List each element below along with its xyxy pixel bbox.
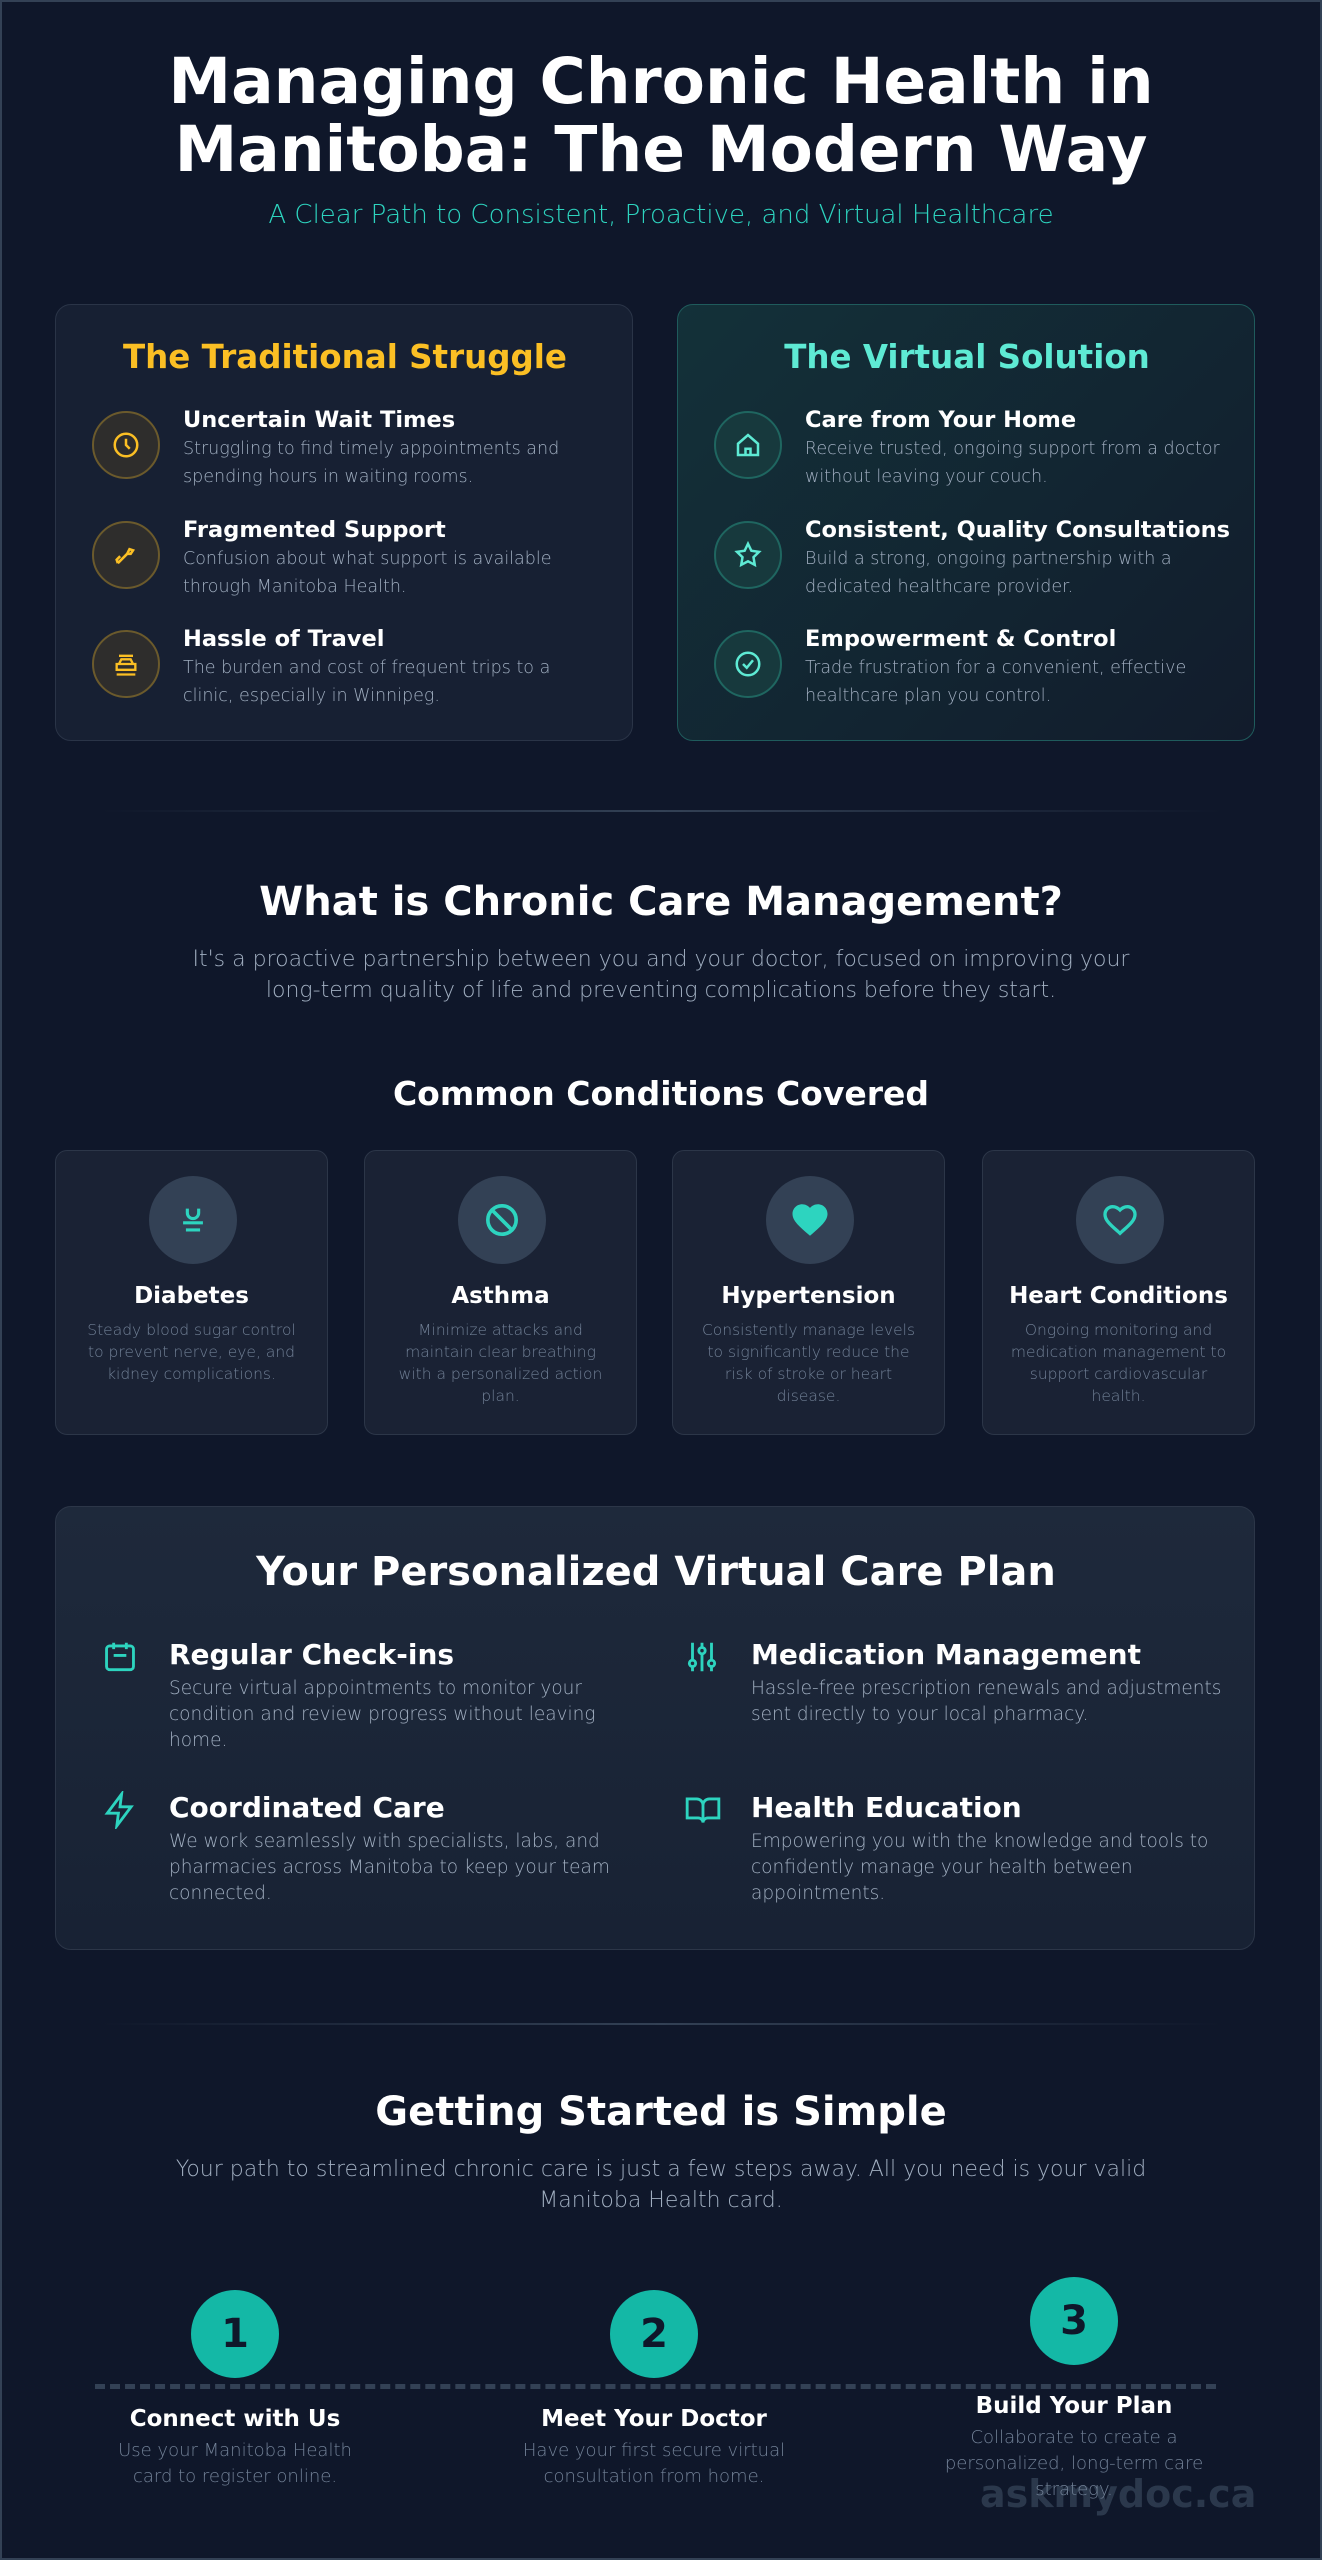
item: empowerment xyxy=(714,626,1186,706)
step 3 xyxy=(945,2277,1203,2500)
title xyxy=(168,45,1154,186)
item: education: Empowering you with the knowledge and tools to confidently manage your health between appointments. xyxy=(751,1831,1208,1904)
icon: diabetes xyxy=(149,1176,237,1264)
card: hypertension xyxy=(672,1150,945,1435)
icon: check circle xyxy=(714,630,782,698)
item: wait times: Uncertain Wait Times xyxy=(183,407,455,433)
panel: personalized virtual care plan xyxy=(55,1506,1255,1950)
panel: virtual solution xyxy=(677,304,1255,741)
card: diabetes xyxy=(55,1150,328,1435)
item: medication xyxy=(688,1638,1221,1725)
item: fragmented: Fragmented Support xyxy=(183,517,446,543)
step 1: Connect with Us xyxy=(130,2406,340,2432)
title: Managing Chronic Health in xyxy=(168,45,1154,118)
card: heart conditions: Ongoing monitoring and medication management to support cardiovascular health. xyxy=(1011,1321,1226,1405)
item: consultations xyxy=(714,517,1230,597)
item: fragmented xyxy=(92,517,552,597)
icon: heart outline xyxy=(1076,1176,1164,1264)
step 1 xyxy=(118,2290,352,2487)
item: wait times xyxy=(92,407,559,487)
item: coordinated care: We work seamlessly with specialists, labs, and pharmacies across Manitoba to keep your team connected. xyxy=(169,1831,610,1904)
item: check-ins xyxy=(105,1638,595,1751)
text: getting started intro: Manitoba Health card. xyxy=(539,2188,783,2213)
panel: traditional struggle xyxy=(55,304,633,741)
item: consultations: dedicated healthcare provider. xyxy=(805,577,1073,597)
icon: number 2 xyxy=(610,2290,698,2378)
icon: heart filled xyxy=(766,1176,854,1264)
subtitle: A Clear Path to Consistent, Proactive, and Virtual Healthcare xyxy=(268,200,1054,230)
step 3: Build Your Plan xyxy=(976,2393,1172,2419)
text: definition: long-term quality of life and preventing complications before they start. xyxy=(266,978,1056,1003)
item: empowerment: Empowerment & Control xyxy=(805,626,1116,652)
icon: sliders xyxy=(688,1642,716,1672)
heading: getting started: Getting Started is Simple xyxy=(375,2089,947,2135)
item: empowerment: healthcare plan you control. xyxy=(805,686,1051,706)
item: home xyxy=(714,407,1220,487)
icon: number 1 xyxy=(191,2290,279,2378)
text: getting started intro: Your path to streamlined chronic care is just a few steps away. All you need is your valid xyxy=(176,2157,1146,2182)
item: medication: Medication Management xyxy=(751,1638,1141,1671)
item: travel: The burden and cost of frequent trips to a xyxy=(183,658,550,678)
item: education xyxy=(686,1791,1208,1904)
step 2 xyxy=(523,2290,785,2487)
item: medication: Hassle-free prescription renewals and adjustments sent directly to your local pharmacy. xyxy=(751,1678,1221,1725)
icon: number 3: 3 xyxy=(1060,2298,1088,2344)
step 3: Collaborate to create a personalized, long-term care strategy. xyxy=(945,2427,1203,2500)
card: asthma: Asthma xyxy=(451,1283,550,1309)
item: check-ins: Secure virtual appointments to monitor your condition and review progress without leaving home. xyxy=(169,1678,595,1751)
icon: tool xyxy=(92,521,160,589)
item: consultations: Consistent, Quality Consultations xyxy=(805,517,1230,543)
heading: traditional struggle: The Traditional Struggle xyxy=(123,338,567,376)
step 2: Meet Your Doctor xyxy=(541,2406,767,2432)
item: fragmented: through Manitoba Health. xyxy=(183,577,406,597)
icon: star xyxy=(714,521,782,589)
heading: care plan: Your Personalized Virtual Care Plan xyxy=(256,1549,1056,1595)
icon: car xyxy=(92,630,160,698)
heading: virtual solution: The Virtual Solution xyxy=(784,338,1150,376)
text: definition xyxy=(193,947,1130,1003)
card: asthma: Minimize attacks and maintain clear breathing with a personalized action plan. xyxy=(399,1321,602,1405)
heading: what is chronic care management: What is Chronic Care Management? xyxy=(259,879,1063,925)
icon: asthma xyxy=(458,1176,546,1264)
item: wait times: Struggling to find timely appointments and xyxy=(183,439,559,459)
item: consultations: Build a strong, ongoing partnership with a xyxy=(805,549,1172,569)
card: hypertension: Hypertension xyxy=(721,1283,896,1309)
item: wait times: spending hours in waiting rooms. xyxy=(183,467,473,487)
item: fragmented: Confusion about what support is available xyxy=(183,549,552,569)
icon: number 2: 2 xyxy=(640,2311,668,2357)
text: getting started intro xyxy=(176,2157,1146,2213)
text: definition: It's a proactive partnership between you and your doctor, focused on improving your xyxy=(193,947,1129,972)
step 1: Use your Manitoba Health card to register online. xyxy=(118,2440,352,2487)
icon: lightning xyxy=(104,1791,134,1829)
item: empowerment: Trade frustration for a convenient, effective xyxy=(805,658,1186,678)
watermark: askmydoc.ca xyxy=(980,2472,1256,2516)
item: travel: Hassle of Travel xyxy=(183,626,384,652)
item: coordinated care: Coordinated Care xyxy=(169,1791,445,1824)
step 2: Have your first secure virtual consultation from home. xyxy=(523,2440,785,2487)
item: education: Health Education xyxy=(751,1791,1022,1824)
icon: number 3 xyxy=(1030,2277,1118,2365)
item: coordinated care xyxy=(104,1791,610,1904)
icon: calendar xyxy=(105,1642,135,1672)
item: travel: clinic, especially in Winnipeg. xyxy=(183,686,440,706)
item: travel xyxy=(92,626,550,706)
card: asthma xyxy=(364,1150,637,1435)
heading: common conditions: Common Conditions Covered xyxy=(393,1074,929,1113)
card: heart conditions: Heart Conditions xyxy=(1009,1283,1228,1309)
card: diabetes: Diabetes xyxy=(134,1283,249,1309)
icon: house xyxy=(714,411,782,479)
item: home: Receive trusted, ongoing support from a doctor xyxy=(805,439,1220,459)
item: home: Care from Your Home xyxy=(805,407,1076,433)
item: check-ins: Regular Check-ins xyxy=(169,1638,454,1671)
card: heart conditions xyxy=(982,1150,1255,1435)
item: home: without leaving your couch. xyxy=(805,467,1048,487)
icon: number 1: 1 xyxy=(221,2311,249,2357)
title: Manitoba: The Modern Way xyxy=(175,113,1147,186)
card: diabetes: Steady blood sugar control to prevent nerve, eye, and kidney complications. xyxy=(87,1321,296,1383)
card: hypertension: Consistently manage levels to significantly reduce the risk of stroke or heart disease. xyxy=(702,1321,915,1405)
icon: book xyxy=(686,1798,720,1823)
icon: clock xyxy=(92,411,160,479)
